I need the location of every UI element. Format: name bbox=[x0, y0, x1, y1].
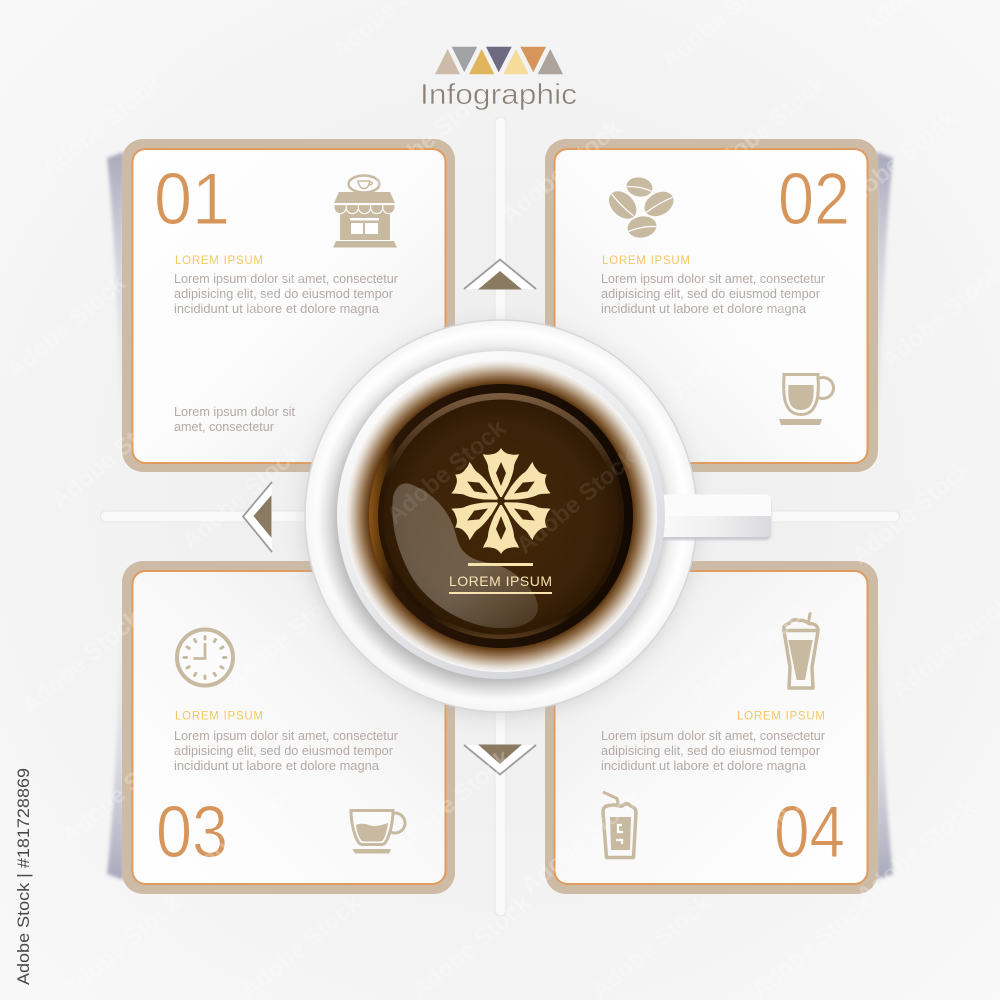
body text: incididunt ut labore et dolore magna bbox=[174, 759, 379, 773]
stock watermark pattern: Adobe Stock bbox=[847, 454, 977, 570]
stock watermark pattern: Adobe Stock bbox=[182, 769, 312, 885]
logo text: LOREM IPSUM bbox=[449, 573, 552, 589]
stock watermark pattern: Adobe Stock bbox=[497, 114, 627, 230]
body text: adipisicing elit, sed do eiusmod tempor bbox=[174, 287, 393, 301]
stock watermark pattern: Adobe Stock bbox=[722, 754, 852, 870]
flower logo bbox=[446, 448, 556, 554]
stock id caption: Adobe Stock | #181728869 bbox=[14, 768, 33, 985]
body text: Lorem ipsum dolor sit amet, consectetur bbox=[601, 272, 825, 286]
note text: amet, consectetur bbox=[174, 420, 274, 434]
body text: Lorem ipsum dolor sit amet, consectetur bbox=[174, 272, 398, 286]
title: Infographic bbox=[420, 79, 577, 111]
body text: adipisicing elit, sed do eiusmod tempor bbox=[601, 744, 820, 758]
icon: latte mug bbox=[779, 374, 834, 425]
stock watermark pattern: Adobe Stock bbox=[207, 239, 337, 355]
faint watermark on coffee: Adobe Stock bbox=[512, 444, 642, 560]
panel: card 02 bbox=[545, 139, 878, 472]
number 04: 04 bbox=[774, 792, 845, 873]
stock watermark pattern: Adobe Stock bbox=[2, 269, 132, 385]
coffee highlight bbox=[392, 483, 538, 628]
coffee cup illustration bbox=[304, 320, 771, 716]
heading: LOREM IPSUM bbox=[602, 255, 690, 267]
panel: card 01 bbox=[122, 139, 455, 472]
note text bbox=[174, 405, 296, 434]
icon: wall clock bbox=[177, 630, 233, 686]
number 01: 01 bbox=[154, 159, 230, 240]
body text bbox=[601, 272, 825, 316]
vertical connector line bbox=[495, 117, 506, 916]
stock watermark pattern: Adobe Stock bbox=[17, 604, 147, 720]
arrow: left bbox=[243, 482, 272, 552]
card shadow: 02 bbox=[876, 152, 893, 460]
saucer bbox=[305, 320, 697, 712]
stock watermark pattern: Adobe Stock bbox=[57, 734, 187, 850]
body text: adipisicing elit, sed do eiusmod tempor bbox=[174, 744, 393, 758]
stock watermark pattern: Adobe Stock bbox=[687, 594, 817, 710]
body text bbox=[174, 729, 398, 773]
icon: coffee beans bbox=[604, 175, 678, 240]
body text: adipisicing elit, sed do eiusmod tempor bbox=[601, 287, 820, 301]
stock watermark pattern: Adobe Stock bbox=[47, 399, 177, 515]
saucer shadow bbox=[304, 324, 696, 716]
arrow: down bbox=[464, 744, 536, 774]
body text bbox=[174, 272, 398, 316]
heading: LOREM IPSUM bbox=[175, 710, 263, 722]
stock watermark pattern: Adobe Stock bbox=[367, 79, 497, 195]
stock watermark pattern: Adobe Stock bbox=[702, 69, 832, 185]
body text: incididunt ut labore et dolore magna bbox=[601, 302, 806, 316]
stock watermark pattern: Adobe Stock bbox=[177, 439, 307, 555]
number 02: 02 bbox=[778, 159, 850, 240]
icon: foam glass bbox=[784, 614, 818, 688]
body text: Lorem ipsum dolor sit amet, consectetur bbox=[601, 729, 825, 743]
icon: coffee shop bbox=[333, 176, 397, 248]
stock watermark pattern: Adobe Stock bbox=[37, 69, 167, 185]
logo triangles bbox=[435, 47, 563, 74]
panel: card 03 bbox=[122, 561, 455, 894]
arrow: up bbox=[464, 260, 536, 290]
card shadow: 03 bbox=[107, 590, 124, 880]
heading: LOREM IPSUM bbox=[175, 255, 263, 267]
body text: Lorem ipsum dolor sit amet, consectetur bbox=[174, 729, 398, 743]
note text: Lorem ipsum dolor sit bbox=[174, 405, 296, 419]
card shadow: 01 bbox=[107, 152, 124, 455]
body text: incididunt ut labore et dolore magna bbox=[601, 759, 806, 773]
stock watermark pattern: Adobe Stock bbox=[852, 794, 982, 910]
card shadow: 04 bbox=[876, 590, 893, 880]
cup body bbox=[337, 351, 665, 679]
body text bbox=[601, 729, 825, 773]
cup shadow bbox=[330, 358, 660, 688]
stock watermark pattern: Adobe Stock bbox=[517, 784, 647, 900]
body text: incididunt ut labore et dolore magna bbox=[174, 302, 379, 316]
cup interior bbox=[345, 360, 657, 672]
icon: iced drink bbox=[603, 792, 636, 858]
horizontal connector line bbox=[100, 511, 900, 522]
heading: LOREM IPSUM bbox=[737, 710, 825, 722]
icon: tea cup bbox=[351, 810, 405, 854]
faint watermark on coffee bbox=[382, 414, 642, 560]
coffee surface bbox=[369, 384, 633, 648]
logo text bbox=[449, 563, 552, 594]
stock watermark pattern: Adobe Stock bbox=[832, 104, 962, 220]
stock watermark pattern: Adobe Stock bbox=[222, 579, 352, 695]
stock watermark pattern: Adobe Stock bbox=[387, 744, 517, 860]
stock watermark pattern: Adobe Stock bbox=[667, 289, 797, 405]
faint watermark on coffee: Adobe Stock bbox=[382, 414, 512, 530]
panel: card 04 bbox=[545, 561, 878, 894]
cup handle bbox=[655, 494, 771, 540]
number 03: 03 bbox=[156, 792, 228, 873]
